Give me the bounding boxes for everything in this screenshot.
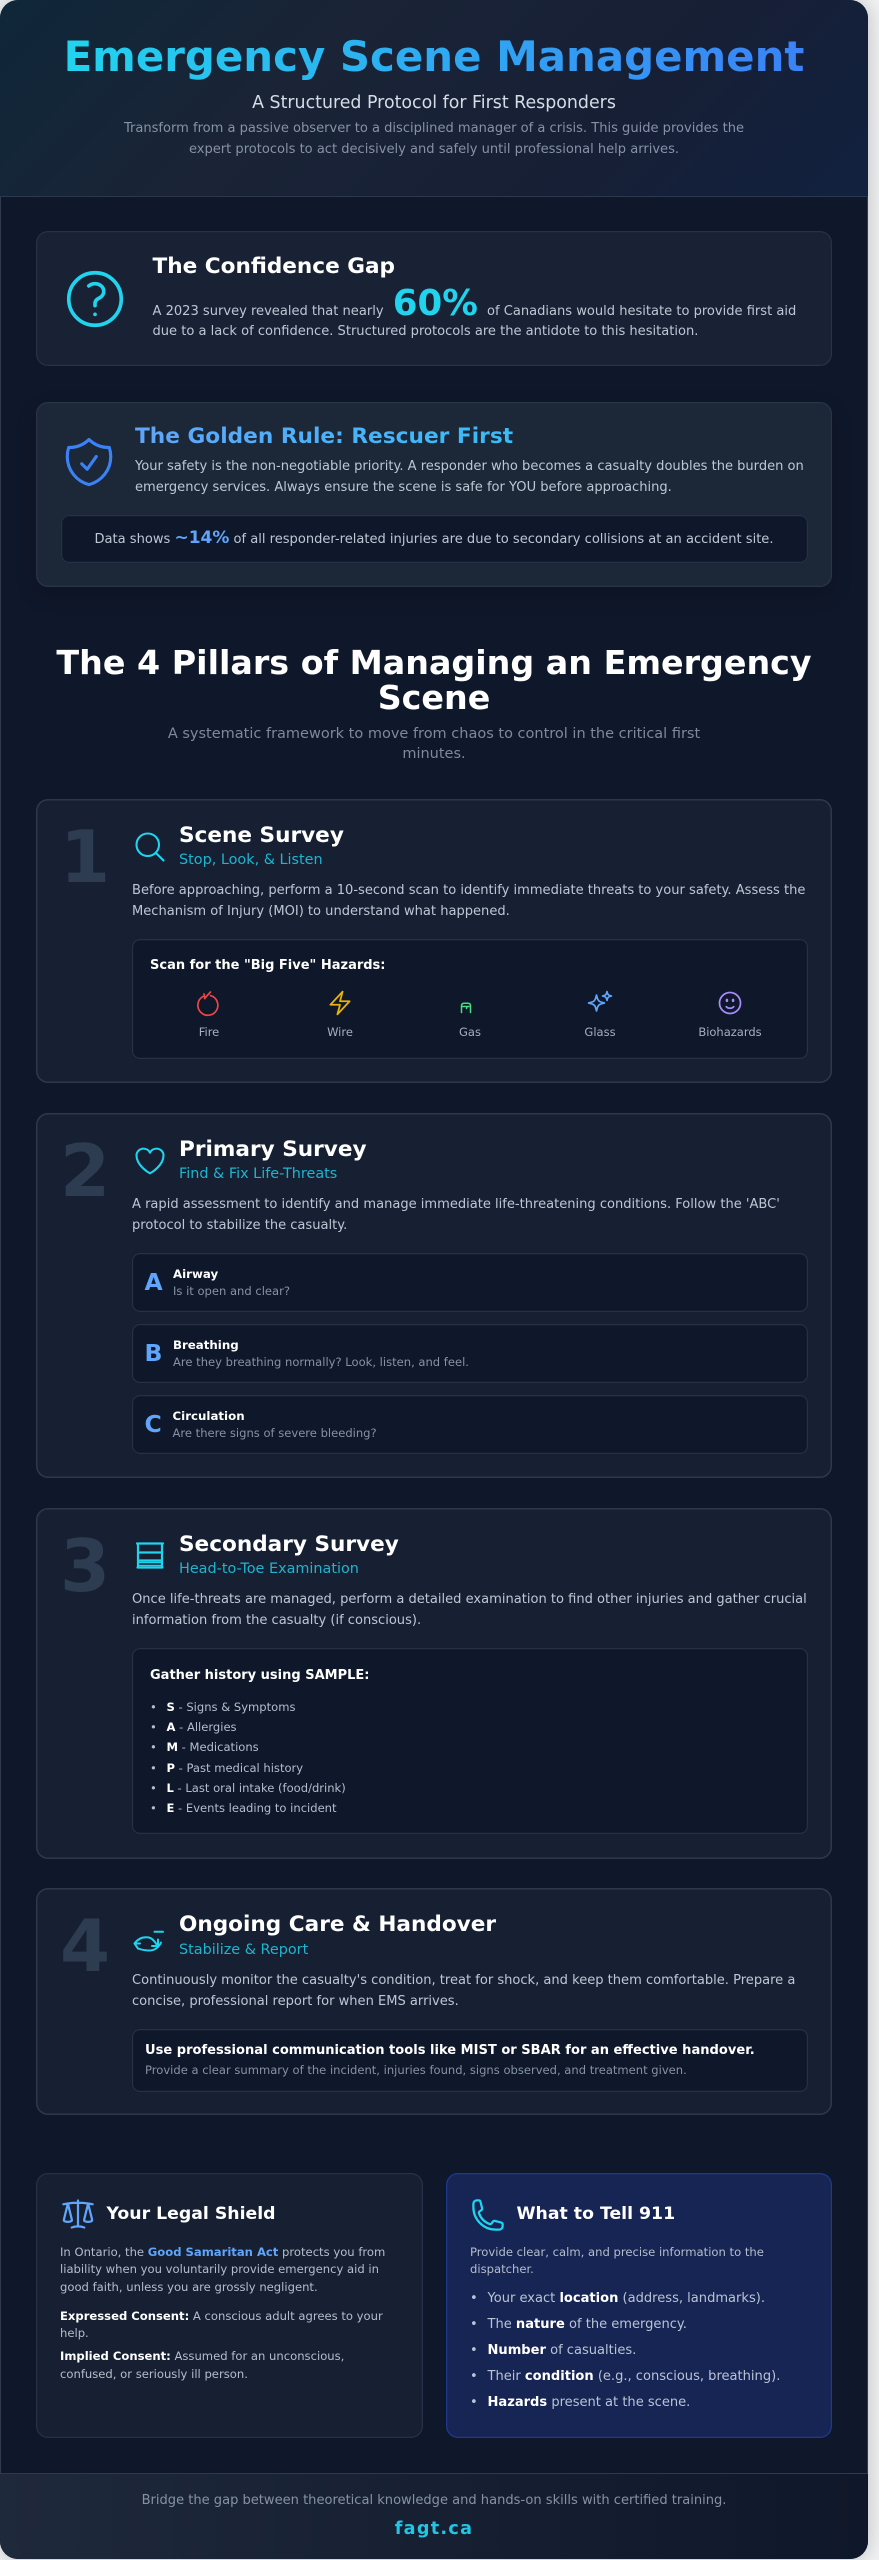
title: Emergency Scene Management <box>64 32 804 81</box>
icon: handover arrows <box>134 1930 164 1952</box>
description <box>132 883 805 918</box>
pillar subtitle: Stabilize & Report <box>179 1942 308 1958</box>
callout text: Data shows ~14% of all responder-related injuries are due to secondary collisions at an accident site. <box>94 528 774 548</box>
handover tools box: Use professional communication tools like MIST or SBAR for an effective handover. <box>145 2043 755 2058</box>
description: A rapid assessment to identify and manage immediate life-threatening conditions. Follow the 'ABC' <box>132 1197 780 1212</box>
ABC item: breathing: B <box>144 1339 162 1367</box>
legal text: Expressed Consent: A conscious adult agrees to your <box>60 2309 383 2323</box>
ABC item: circulation: C <box>144 1410 162 1438</box>
SAMPLE list: M - Medications <box>166 1740 259 1754</box>
heading: What to Tell 911 <box>516 2204 675 2224</box>
panel: legal shield <box>36 2173 423 2438</box>
hazard: biohazards: Biohazards <box>698 1025 762 1039</box>
ABC item: circulation <box>132 1395 808 1454</box>
legal text: good faith, unless you are grossly negligent. <box>60 2280 318 2294</box>
legal text: help. <box>60 2326 89 2340</box>
ABC item: airway: A <box>144 1268 163 1296</box>
SAMPLE list: • <box>150 1740 157 1754</box>
SAMPLE list: P - Past medical history <box>166 1761 303 1775</box>
footer <box>0 2473 868 2559</box>
description: Mechanism of Injury (MOI) to understand what happened. <box>132 904 510 918</box>
description <box>132 1197 780 1232</box>
heading: Your Legal Shield <box>106 2204 276 2224</box>
panel: confidence gap <box>36 231 832 366</box>
hazard: wire <box>327 990 353 1039</box>
body text <box>135 459 804 494</box>
section heading: 4 pillars: A systematic framework to move from chaos to control in the critical first <box>168 726 700 742</box>
911 checklist: • <box>470 2395 478 2410</box>
SAMPLE list: • <box>150 1720 157 1734</box>
intro text: dispatcher. <box>470 2262 534 2276</box>
description: Continuously monitor the casualty's condition, treat for shock, and keep them comfortable. Prepare a <box>132 1973 795 1988</box>
description: concise, professional report for when EMS arrives. <box>132 1994 459 2008</box>
icon: stacked layers <box>136 1542 164 1569</box>
pillar title: Scene Survey <box>179 822 344 848</box>
pillar number: 4 <box>60 1904 110 1988</box>
icon: question mark <box>66 270 124 328</box>
footer link: fagt.ca <box>395 2519 473 2539</box>
heading: The Confidence Gap <box>152 254 395 279</box>
icon: heart <box>135 1148 165 1174</box>
pillar title: Secondary Survey <box>179 1532 399 1557</box>
description: information from the casualty (if conscious). <box>132 1612 421 1628</box>
SAMPLE list: • <box>150 1801 157 1815</box>
section heading: 4 pillars: Scene <box>378 678 490 716</box>
section heading: 4 pillars <box>56 643 812 762</box>
handover tools box <box>132 2029 808 2092</box>
ABC item: airway <box>132 1253 808 1312</box>
pillar number: 2 <box>60 1129 110 1213</box>
header panel <box>0 0 868 197</box>
hazard: biohazards <box>698 992 762 1039</box>
legal text: confused, or seriously ill person. <box>60 2367 248 2381</box>
description <box>132 1592 807 1628</box>
pillar number: 1 <box>60 815 110 899</box>
hazard: glass <box>584 990 616 1039</box>
pillar number: 3 <box>60 1524 110 1608</box>
ABC item: circulation: Circulation <box>172 1409 245 1423</box>
pillar subtitle: Stop, Look, & Listen <box>179 852 323 868</box>
911 checklist: The nature of the emergency. <box>488 2317 687 2332</box>
SAMPLE list: A - Allergies <box>166 1720 237 1734</box>
heading: The Golden Rule: Rescuer First <box>135 424 513 449</box>
hazard: gas: Gas <box>459 1025 481 1039</box>
ABC item: circulation: Are there signs of severe bleeding? <box>172 1426 377 1440</box>
panel: golden rule <box>36 402 832 587</box>
pillar title: Ongoing Care & Handover <box>179 1912 496 1937</box>
icon: scales <box>62 2199 94 2229</box>
section heading: 4 pillars: minutes. <box>402 746 466 762</box>
header description <box>124 121 744 156</box>
description: Before approaching, perform a 10-second scan to identify immediate threats to your safety. Assess the <box>132 883 805 898</box>
icon: magnifying glass <box>135 832 164 862</box>
icon: shield check <box>66 438 112 486</box>
handover tools box: Provide a clear summary of the incident, injuries found, signs observed, and treatment given. <box>145 2063 687 2077</box>
hazard: wire: Wire <box>327 1025 353 1039</box>
SAMPLE list: S - Signs & Symptoms <box>166 1700 295 1714</box>
legal text: Implied Consent: Assumed for an unconscious, <box>60 2349 344 2363</box>
panel: pillar 3 secondary survey <box>36 1508 832 1859</box>
SAMPLE list: • <box>150 1700 157 1714</box>
SAMPLE list: E - Events leading to incident <box>166 1801 337 1815</box>
header description: Transform from a passive observer to a disciplined manager of a crisis. This guide provides the <box>124 121 744 136</box>
big five hazards box <box>132 939 808 1059</box>
911 checklist: Hazards present at the scene. <box>488 2395 690 2410</box>
ABC item: airway: Airway <box>173 1267 218 1281</box>
pillar subtitle: Head-to-Toe Examination <box>179 1561 359 1577</box>
hazards heading: Scan for the "Big Five" Hazards: <box>150 958 386 973</box>
911 checklist: • <box>470 2343 478 2358</box>
hazard: fire <box>197 991 219 1039</box>
description: protocol to stabilize the casualty. <box>132 1218 347 1232</box>
legal text: liability when you voluntarily provide emergency aid in <box>60 2262 379 2276</box>
pillar subtitle: Find & Fix Life-Threats <box>179 1166 337 1182</box>
911 checklist <box>470 2291 780 2410</box>
911 checklist: Their condition (e.g., conscious, breathing). <box>488 2369 780 2384</box>
ABC item: breathing <box>132 1324 808 1383</box>
panel: pillar 2 primary survey <box>36 1113 832 1478</box>
SAMPLE list: L - Last oral intake (food/drink) <box>166 1781 346 1795</box>
SAMPLE list: • <box>150 1781 157 1795</box>
911 checklist: • <box>470 2291 478 2306</box>
SAMPLE list: • <box>150 1761 157 1775</box>
panel: pillar 4 ongoing care <box>36 1888 832 2115</box>
intro text: Provide clear, calm, and precise information to the <box>470 2245 764 2259</box>
911 checklist: Your exact location (address, landmarks). <box>488 2291 765 2306</box>
ABC item: breathing: Are they breathing normally? Look, listen, and feel. <box>173 1355 469 1369</box>
description: Once life-threats are managed, perform a detailed examination to find other injuries and gather crucial <box>132 1592 807 1607</box>
statistic text: due to a lack of confidence. Structured protocols are the antidote to this hesitation. <box>152 324 698 339</box>
description <box>132 1973 795 2008</box>
ABC item: airway: Is it open and clear? <box>173 1284 290 1298</box>
header description: expert protocols to act decisively and safely until professional help arrives. <box>189 142 679 156</box>
subtitle: A Structured Protocol for First Responders <box>252 93 616 113</box>
panel: pillar 1 scene survey <box>36 799 832 1083</box>
legal text <box>60 2245 385 2381</box>
legal text: In Ontario, the Good Samaritan Act protects you from <box>60 2245 385 2259</box>
SAMPLE heading: Gather history using SAMPLE: <box>150 1668 369 1683</box>
SAMPLE list <box>150 1700 346 1815</box>
icon: phone <box>472 2199 504 2231</box>
body text: Your safety is the non-negotiable priority. A responder who becomes a casualty doubles the burden on <box>135 459 804 474</box>
intro text <box>470 2245 764 2276</box>
panel: what to tell 911 <box>446 2173 832 2438</box>
SAMPLE history box <box>132 1648 808 1834</box>
section heading: 4 pillars: The 4 Pillars of Managing an Emergency <box>56 643 812 682</box>
911 checklist: Number of casualties. <box>488 2343 636 2358</box>
911 checklist: • <box>470 2317 478 2332</box>
statistic text: A 2023 survey revealed that nearly 60% of Canadians would hesitate to provide first aid <box>152 282 796 324</box>
pillar title: Primary Survey <box>179 1137 367 1162</box>
footer text: Bridge the gap between theoretical knowledge and hands-on skills with certified training. <box>142 2493 726 2508</box>
hazard: glass: Glass <box>584 1025 616 1039</box>
ABC item: breathing: Breathing <box>173 1338 239 1352</box>
callout: secondary collisions <box>60 515 808 563</box>
911 checklist: • <box>470 2369 478 2384</box>
hazard: gas <box>459 1002 481 1039</box>
hazard: fire: Fire <box>199 1025 219 1039</box>
body text: emergency services. Always ensure the scene is safe for YOU before approaching. <box>135 480 672 494</box>
